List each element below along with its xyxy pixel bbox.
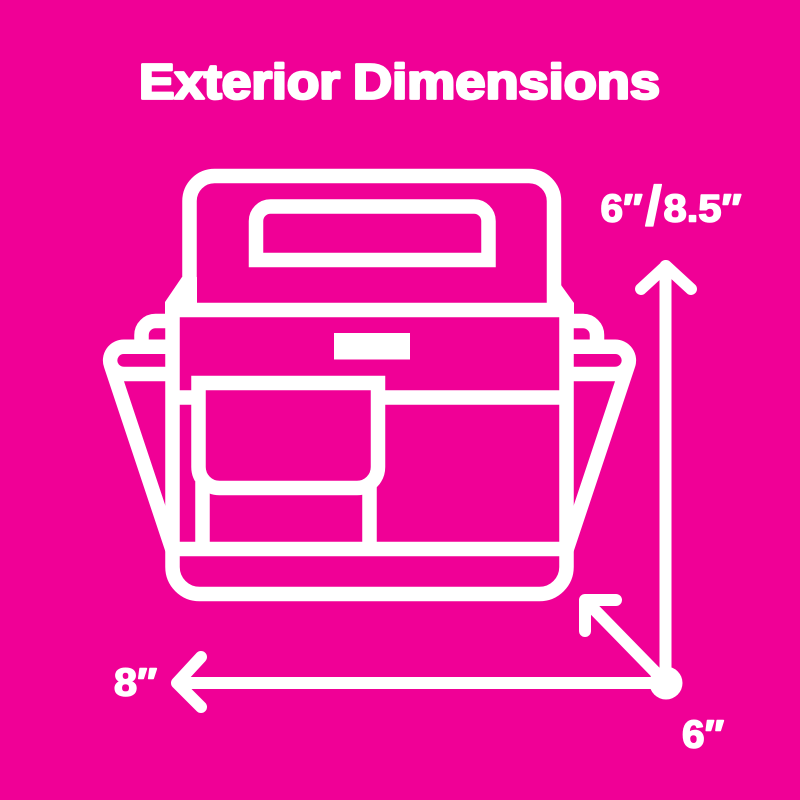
label: depth: 6″ xyxy=(682,714,724,756)
label: height xyxy=(600,174,742,237)
arrow: width xyxy=(177,657,666,707)
icon: lunch bag xyxy=(110,176,629,594)
bag handle panel xyxy=(165,176,574,317)
label: height: 8.5″ xyxy=(664,188,742,230)
arrow: depth xyxy=(585,600,666,683)
label: height: / xyxy=(645,174,662,237)
label: height: 6″ xyxy=(600,188,642,230)
label: width: 8″ xyxy=(114,662,157,704)
arrow origin dot xyxy=(650,666,682,700)
front pocket flap xyxy=(198,383,378,488)
bag body and base xyxy=(165,303,574,594)
arrow: height xyxy=(641,266,691,683)
front pocket xyxy=(202,482,370,549)
seam line xyxy=(172,390,567,405)
handle cut-out xyxy=(256,206,488,260)
left side pocket xyxy=(110,321,172,550)
title xyxy=(139,56,660,110)
zipper tag xyxy=(334,333,410,360)
title: Exterior xyxy=(139,56,340,110)
right side pocket xyxy=(566,321,629,550)
title: Dimensions xyxy=(353,56,660,110)
